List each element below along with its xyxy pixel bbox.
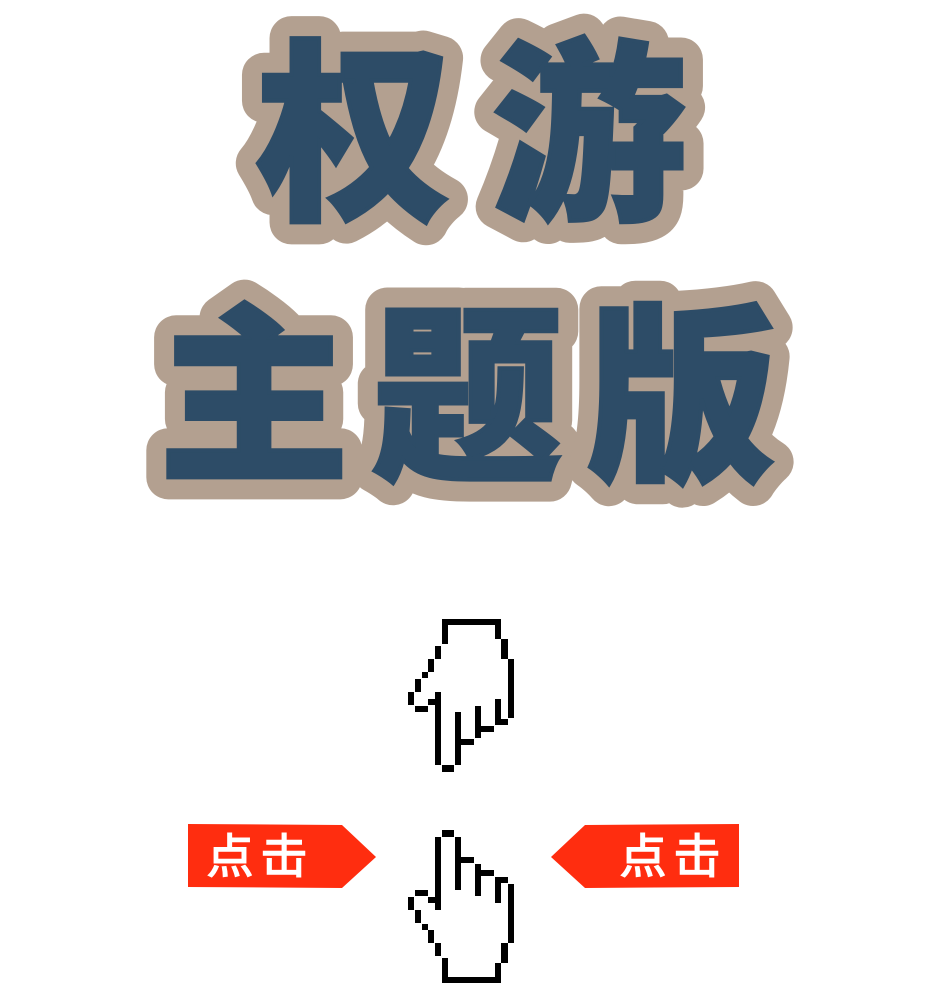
title text: 权 — [257, 29, 451, 246]
callout: right click arrow — [551, 824, 739, 888]
title text: 版 — [586, 294, 776, 506]
callout: right click arrow: 点 — [620, 830, 666, 883]
title outline: 游 — [492, 29, 686, 246]
title — [159, 29, 776, 506]
title text: 游 — [492, 29, 686, 246]
callout: left click arrow: 击 — [260, 830, 308, 883]
title outline — [159, 29, 776, 506]
callout: left click arrow: 点 — [206, 830, 254, 883]
title text — [159, 29, 776, 506]
title text: 主 — [159, 294, 349, 506]
title text: 题 — [372, 294, 562, 506]
icon: pointing hand up — [408, 830, 514, 983]
title outline: 主 — [159, 294, 349, 506]
title outline: 题 — [372, 294, 562, 506]
icon: pointing hand down — [408, 619, 514, 772]
title outline: 版 — [586, 294, 776, 506]
title outline: 权 — [257, 29, 451, 246]
callout: left click arrow — [188, 824, 376, 888]
callout: right click arrow: 击 — [674, 830, 720, 883]
